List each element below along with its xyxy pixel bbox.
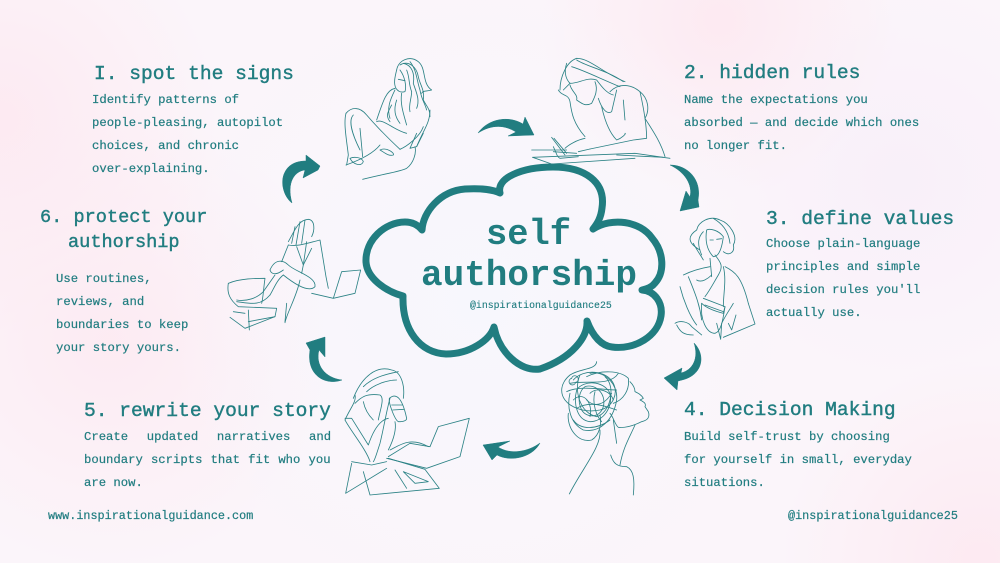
central cloud with title: [366, 167, 662, 369]
illustration: woman on chair with laptop: [228, 219, 361, 330]
illustration: woman with scribbled mind: [562, 362, 649, 495]
text 1: people-pleasing, autopilot: [92, 116, 283, 130]
arrow: step 1 to 2: [478, 117, 534, 136]
step 5: rewrite your story: [84, 400, 331, 490]
heading 6: 6. protect your: [40, 207, 207, 228]
text 3: principles and simple: [766, 260, 920, 274]
arrow: step 4 to 5: [483, 441, 540, 460]
illustration: woman with coffee and laptop: [345, 369, 469, 495]
heading 1: I. spot the signs: [94, 63, 294, 85]
text 3: actually use.: [766, 306, 862, 320]
text 6: Use routines,: [56, 272, 152, 286]
step 6: protect your authorship: [40, 207, 207, 355]
illustration: woman sitting: [345, 59, 432, 179]
text 2: Name the expectations you: [684, 93, 868, 107]
arrow: step 5 to 6: [306, 337, 342, 382]
illustration: woman thinking: [675, 218, 755, 339]
title: authorship: authorship: [421, 255, 637, 296]
arrow: step 2 to 3: [670, 165, 699, 211]
heading 5: 5. rewrite your story: [84, 400, 331, 422]
text 2: absorbed — and decide which ones: [684, 116, 919, 130]
text 1: choices, and chronic: [92, 139, 239, 153]
arrow: step 3 to 4: [664, 343, 701, 390]
text 6: reviews, and: [56, 295, 144, 309]
text 2: no longer fit.: [684, 139, 787, 153]
heading 4: 4. Decision Making: [684, 399, 896, 421]
step 1: spot the signs: [92, 63, 294, 176]
text 5: are now.: [84, 476, 143, 490]
footer website: www.inspirationalguidance.com: [48, 509, 253, 523]
text 1: Identify patterns of: [92, 93, 239, 107]
title: self: self: [486, 214, 571, 255]
text 5: boundary scripts that fit who you: [84, 453, 331, 467]
text 4: for yourself in small, everyday: [684, 453, 912, 467]
text 1: over-explaining.: [92, 162, 210, 176]
heading 3: 3. define values: [766, 208, 954, 230]
cloud outline: [366, 167, 662, 369]
step 2: hidden rules: [684, 62, 919, 153]
step 3: define values: [766, 208, 954, 320]
step 4: decision making: [684, 399, 912, 490]
footer handle: @inspirationalguidance25: [788, 509, 958, 523]
arrow: step 6 to 1: [283, 155, 320, 203]
text 6: your story yours.: [56, 341, 181, 355]
text 5: Create updated narratives and: [84, 430, 331, 444]
text 3: Choose plain-language: [766, 237, 920, 251]
text 6: boundaries to keep: [56, 318, 188, 332]
text 4: Build self-trust by choosing: [684, 430, 890, 444]
cloud handle: @inspirationalguidance25: [470, 300, 612, 311]
heading 6: authorship: [68, 232, 180, 253]
illustration: woman writing: [532, 58, 670, 164]
text 4: situations.: [684, 476, 765, 490]
text 3: decision rules you'll: [766, 283, 920, 297]
heading 2: 2. hidden rules: [684, 62, 860, 84]
